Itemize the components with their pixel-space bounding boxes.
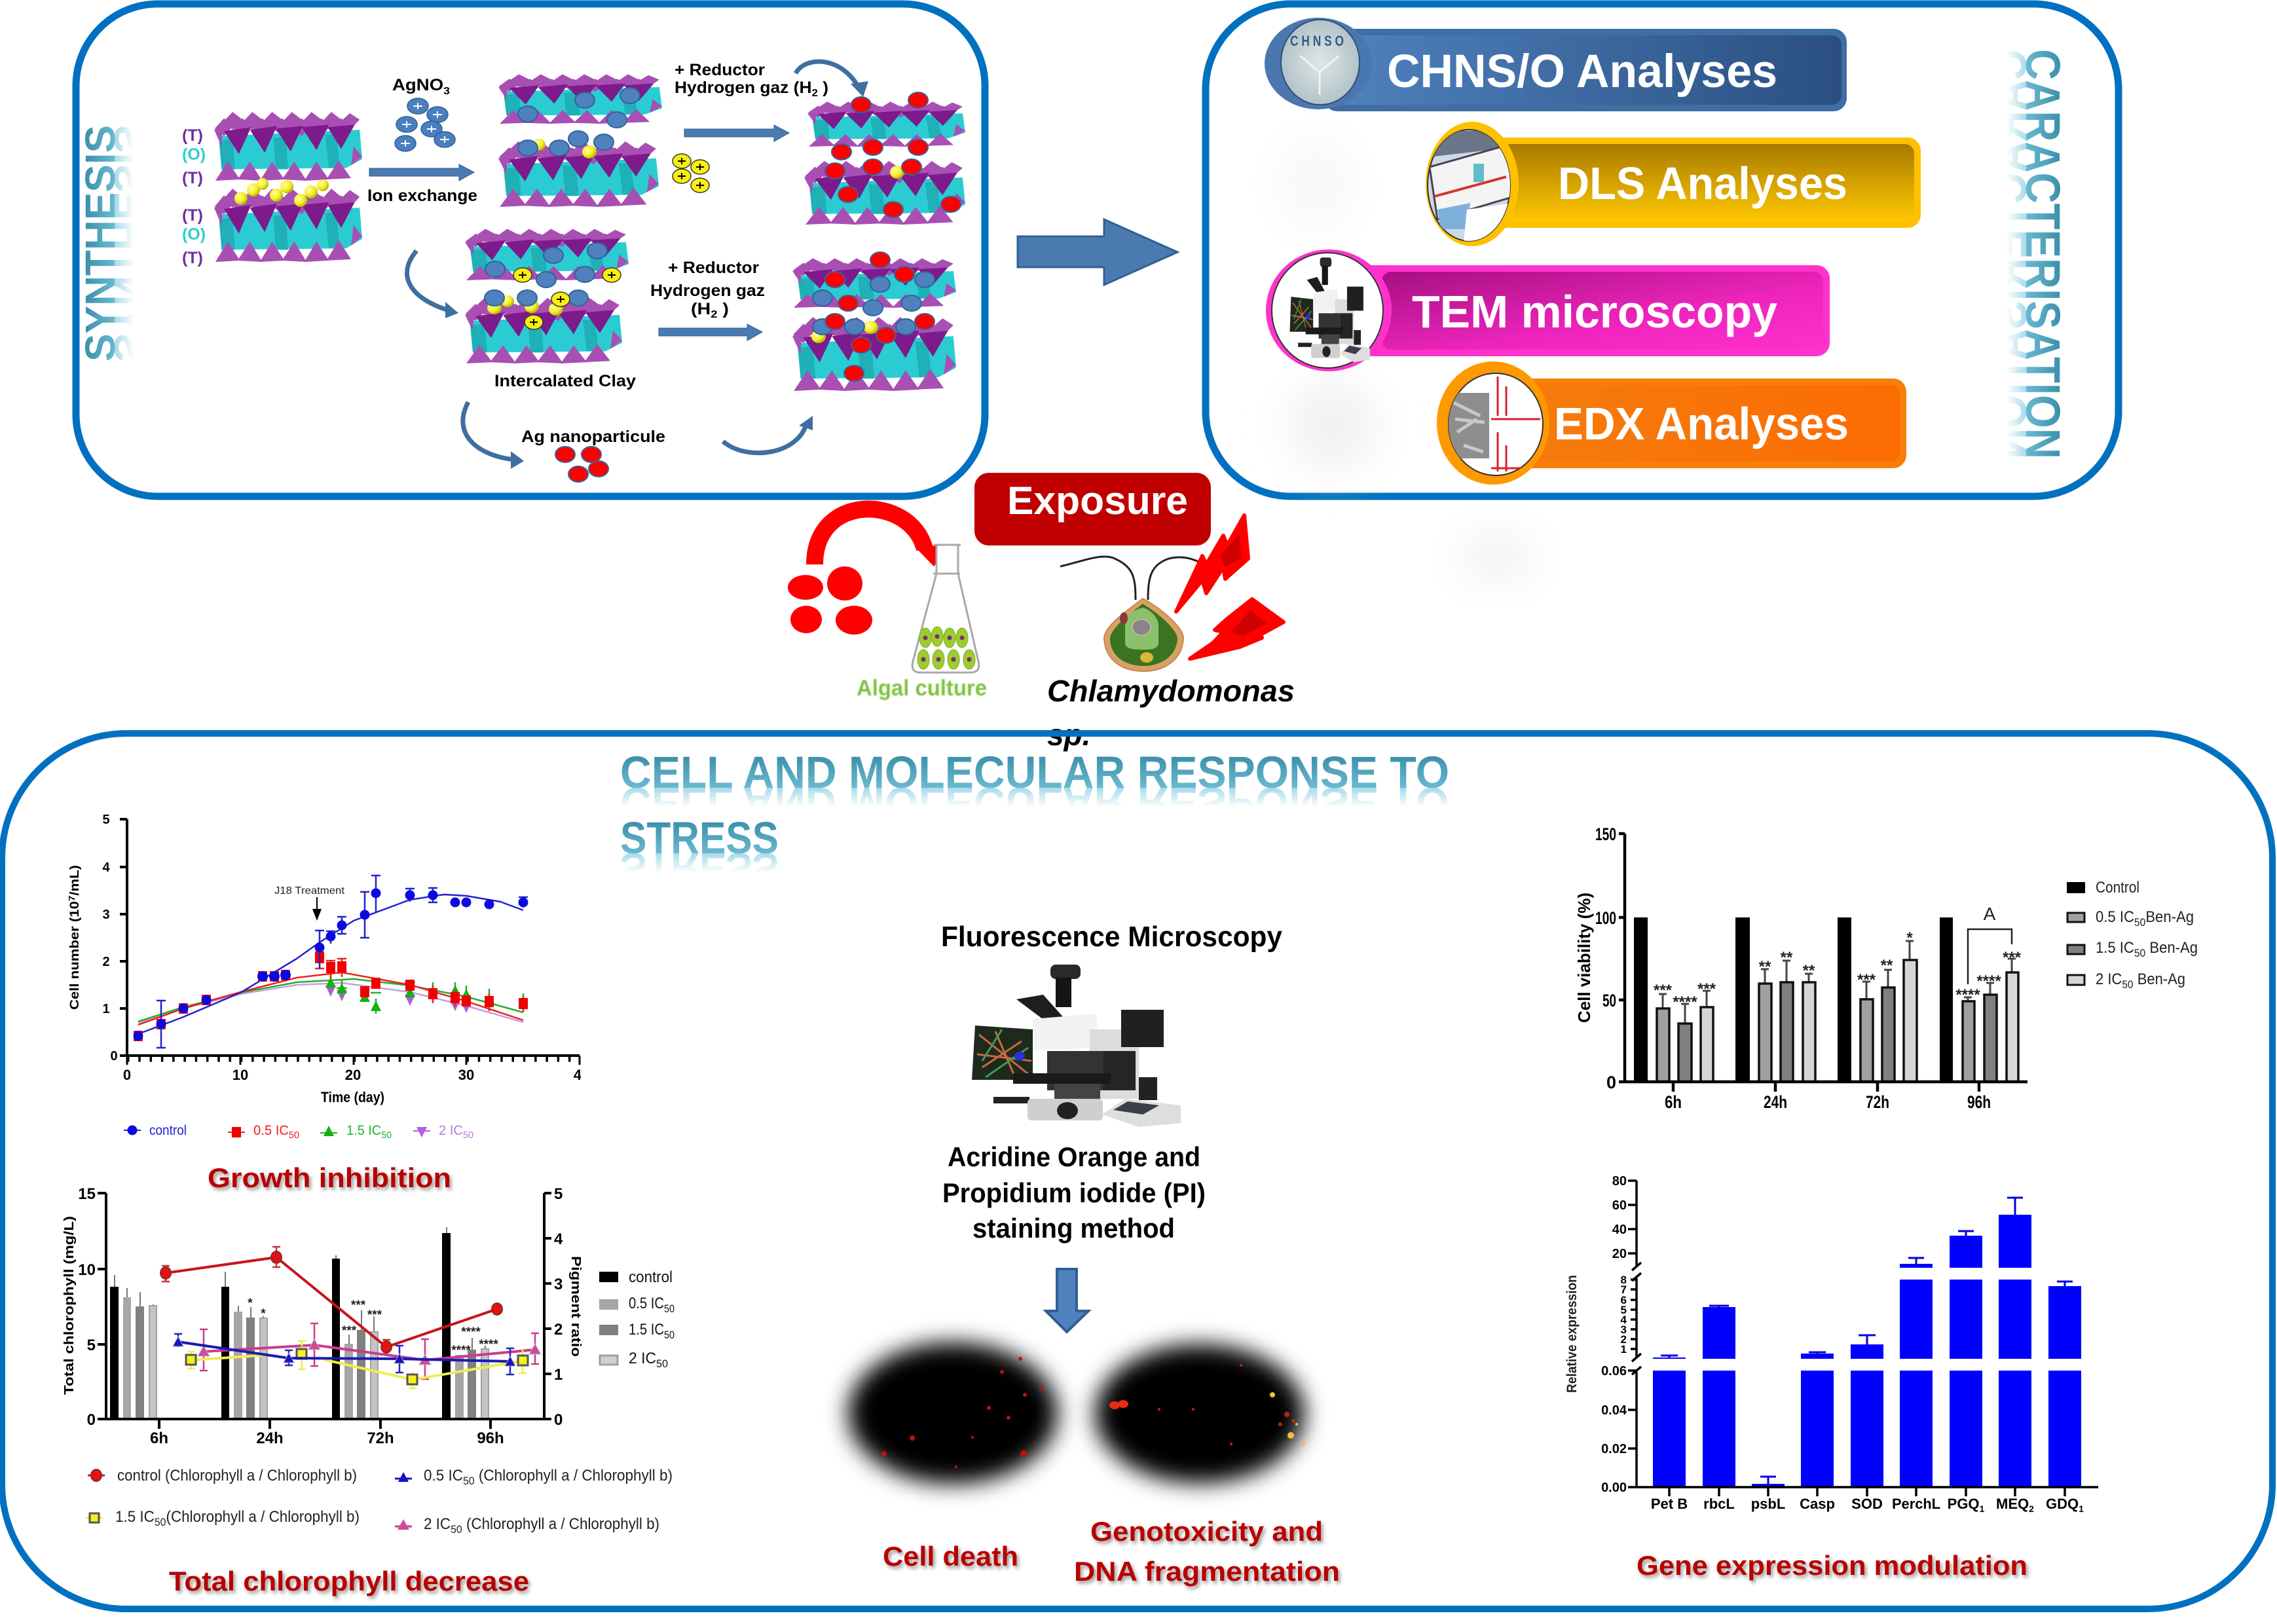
arrow: curved top	[796, 62, 868, 97]
arrow: curved to nanoparticles	[463, 402, 524, 469]
legend	[124, 1123, 473, 1141]
axes: 2	[1621, 1333, 1627, 1346]
axes: 0.04	[1601, 1403, 1627, 1418]
bar legend: 50	[664, 1329, 675, 1341]
bar legend: 0.5 IC	[629, 1295, 671, 1312]
heading: cell and molecular response to stress: STRESS	[620, 843, 779, 894]
axes: 2	[2029, 1504, 2034, 1514]
axes: 3	[1621, 1323, 1627, 1336]
y axis: 3	[102, 908, 110, 922]
significance bracket	[1968, 904, 2012, 984]
significance stars: *	[261, 1307, 266, 1321]
axes: Relative expression	[1564, 1275, 1580, 1393]
arrow: synthesis to characterisation	[1018, 219, 1177, 285]
icon: Ag nanoparticles	[555, 447, 608, 482]
y axis: 0	[110, 1049, 118, 1063]
line series: 1.5 IC50	[186, 1341, 528, 1388]
label: intercalated clay: Intercalated Clay	[494, 372, 636, 390]
heading: fluorescence microscopy: Fluorescence Microscopy	[941, 921, 1283, 953]
legend: Ben-Ag	[2145, 908, 2194, 926]
y axis	[67, 813, 127, 1063]
error bars	[1659, 941, 2016, 1024]
label: reductor bottom: 2	[711, 309, 718, 320]
clay structure: intercalated clay	[465, 229, 629, 363]
x axis: 30	[458, 1067, 474, 1083]
significance stars: *	[248, 1297, 253, 1310]
axes: 72h	[367, 1430, 394, 1447]
clay structure: starting clay	[214, 112, 362, 262]
significance stars: ***	[342, 1324, 357, 1338]
pill: CHNS/O analyses	[1265, 18, 1847, 111]
significance stars: ***	[351, 1299, 366, 1312]
y axis: 2	[102, 955, 110, 969]
line legend: 50	[155, 1516, 166, 1528]
bar legend: 2 IC	[629, 1350, 657, 1367]
legend: Control	[2096, 879, 2139, 896]
axes: 60	[1612, 1198, 1627, 1213]
axes: PGQ	[1948, 1496, 1980, 1512]
y axis: 1	[102, 1002, 110, 1016]
heading: growth inhibition: Growth inhibition	[208, 1162, 451, 1193]
text: staining method: Propidium iodide (PI)	[942, 1177, 1206, 1208]
legend: 50	[381, 1130, 392, 1141]
stars: ****	[1673, 993, 1697, 1011]
legend	[2067, 879, 2198, 991]
label: reductor top: Hydrogen gaz (H	[675, 79, 805, 97]
label: reductor top	[675, 61, 828, 99]
axes: 1	[2079, 1504, 2084, 1514]
arrow: ion exchange	[369, 164, 474, 181]
bar legend: control	[629, 1268, 673, 1286]
axes: 96h	[1967, 1092, 1991, 1112]
chart: total chlorophyll	[62, 1185, 675, 1536]
legend: 0.5 IC	[2096, 908, 2138, 926]
bars	[1634, 917, 2018, 1082]
line series: control	[160, 1247, 502, 1354]
stars: **	[1759, 958, 1771, 976]
heading: total chlorophyll decrease: Total chlorophyll decrease	[169, 1566, 529, 1596]
label: reductor bottom	[650, 259, 765, 320]
axes: 4	[1621, 1314, 1627, 1326]
bar legend: 1.5 IC	[629, 1321, 671, 1338]
y axis: Cell number (10	[68, 916, 82, 1010]
axes: 0	[87, 1411, 96, 1429]
soft grey smudge	[1457, 530, 1536, 583]
axes: 4	[554, 1230, 563, 1248]
layer labels T O T: (T)	[182, 126, 203, 145]
axes: PerchL	[1892, 1496, 1940, 1512]
axes: 50	[1602, 991, 1616, 1010]
chart: growth inhibition	[67, 813, 589, 1141]
legend: 50	[2134, 947, 2145, 959]
stars: **	[1781, 949, 1793, 967]
line legend: 0.5 IC	[424, 1467, 466, 1485]
label: sp.: sp.	[1047, 718, 1090, 752]
icon: fluorescence microscope	[972, 965, 1181, 1127]
x axis: 10	[232, 1067, 248, 1083]
stars: ***	[2003, 949, 2022, 967]
stars: ***	[1654, 982, 1673, 999]
heading: CARACTERISATION: CARACTERISATION	[2016, 49, 2070, 459]
arrow: reduction top	[684, 125, 789, 141]
legend: 50	[463, 1130, 473, 1141]
heading: CARACTERISATION: CARACTERISATION	[1982, 49, 2037, 459]
axes	[62, 1185, 583, 1447]
axes: Pet B	[1651, 1496, 1688, 1512]
chart: cell viability	[1574, 824, 2198, 1112]
pill: EDX analyses: EDX Analyses	[1554, 398, 1849, 449]
axes: 6h	[1665, 1092, 1682, 1112]
icon: culture flask	[912, 545, 979, 673]
label: ion exchange: Ion exchange	[367, 187, 477, 205]
clay structure: reduced clay top	[804, 92, 965, 225]
pill: EDX analyses	[1437, 361, 1906, 485]
layer labels T O T: (O)	[182, 145, 206, 164]
axes: 1	[554, 1366, 563, 1384]
axes: 96h	[477, 1430, 504, 1447]
series: green	[325, 974, 523, 1014]
axes: SOD	[1851, 1496, 1883, 1512]
axes: 24h	[1764, 1092, 1787, 1112]
stars: *	[1906, 929, 1913, 947]
label: reductor bottom: Hydrogen gaz	[650, 282, 765, 300]
y axis: 5	[102, 813, 110, 827]
panel: synthesis	[76, 4, 985, 496]
label: reductor top: )	[818, 79, 828, 97]
axes: 6h	[150, 1430, 168, 1447]
axes: 5	[1621, 1304, 1627, 1316]
arrow: curved to intercalated clay	[407, 251, 458, 318]
layer labels T O T: (T)	[182, 169, 203, 187]
y axis: 7	[67, 896, 77, 901]
icon: lightning bolts	[1176, 515, 1284, 659]
significance stars	[248, 1297, 498, 1357]
panel: characterisation	[1206, 4, 2119, 496]
layer labels T O T: (O)	[182, 225, 206, 244]
layer labels T O T: (T)	[182, 249, 203, 267]
series curves	[138, 895, 523, 1034]
bars	[1653, 1215, 2081, 1487]
label: reductor top: 2	[811, 88, 818, 99]
icon: silver ions	[395, 98, 455, 151]
legend: 50	[2122, 978, 2134, 991]
label: reductor bottom: )	[717, 300, 729, 318]
heading: cell and molecular response to stress: STRESS	[620, 813, 779, 863]
pill: TEM microscopy	[1266, 249, 1830, 371]
label: algal culture: Algal culture	[857, 676, 987, 701]
arrow: curved from nanoparticles	[723, 416, 813, 453]
heading: cell and molecular response to stress	[620, 747, 1449, 894]
axes: 40	[1612, 1223, 1627, 1237]
treatment annotation: J18 Treatment	[274, 885, 345, 896]
legend: 2 IC	[439, 1123, 464, 1138]
x axis: 40	[574, 1067, 589, 1083]
label: AgNO3: 3	[443, 86, 450, 97]
line series: 0.5 IC50	[173, 1334, 515, 1375]
heading: gene expression modulation: Gene expression modulation	[1637, 1550, 2027, 1581]
clay structure: exchanged clay	[498, 74, 662, 207]
x axis: Time (day)	[321, 1089, 384, 1105]
axes: 24h	[256, 1430, 284, 1447]
callout: exposure	[974, 473, 1211, 545]
label: Ag nanoparticule: Ag nanoparticule	[521, 428, 665, 446]
legend: 2 IC	[2096, 970, 2124, 988]
heading: SYNTHESIS: SYNTHESIS	[105, 125, 153, 361]
significance stars: ****	[451, 1344, 471, 1357]
bar legend	[599, 1268, 675, 1370]
axes: Cell viability (%)	[1574, 893, 1594, 1023]
heading: genotoxicity and DNA fragmentation: Genotoxicity and	[1090, 1516, 1323, 1547]
error bars	[1661, 1198, 2073, 1484]
pill: TEM microscopy: TEM microscopy	[1412, 286, 1777, 337]
label: reductor bottom: (H	[691, 300, 708, 318]
axes: 1	[1621, 1343, 1627, 1356]
axes: Pigment ratio	[568, 1256, 583, 1357]
axes: 6	[1621, 1294, 1627, 1306]
icon: nanoparticles into culture	[788, 509, 950, 635]
axes: 15	[78, 1185, 96, 1203]
pill: CHNS/O analyses: CHNS/O Analyses	[1387, 46, 1777, 98]
legend: control	[149, 1123, 187, 1138]
legend: 1.5 IC	[346, 1123, 383, 1138]
axes: Total chlorophyll (mg/L)	[62, 1216, 77, 1395]
stars	[1654, 929, 2022, 1011]
bars	[110, 1227, 489, 1419]
heading: cell and molecular response to stress: CELL AND MOLECULAR RESPONSE TO	[620, 747, 1449, 798]
axes	[1564, 1174, 2098, 1514]
axes: 3	[554, 1276, 563, 1293]
y axis: 4	[102, 860, 110, 875]
x axis: 0	[123, 1067, 131, 1083]
line legend: 50	[451, 1523, 462, 1536]
axes: 150	[1595, 824, 1616, 844]
line legend: (Chlorophyll a / Chlorophyll b)	[475, 1467, 673, 1485]
panel: cell and molecular response	[2, 733, 2272, 1609]
axes: 8	[1621, 1274, 1627, 1286]
heading: SYNTHESIS: SYNTHESIS	[77, 125, 124, 361]
arrow: staining to images	[1046, 1269, 1088, 1332]
series: control	[134, 876, 528, 1048]
heading: genotoxicity and DNA fragmentation	[1074, 1516, 1340, 1587]
layer labels T O T: (T)	[182, 206, 203, 225]
image: genotoxicity micrograph	[1095, 1344, 1305, 1483]
axes: 0.02	[1601, 1442, 1627, 1456]
treatment annotation	[274, 885, 345, 921]
axes: 2	[554, 1321, 563, 1338]
axes: psbL	[1751, 1496, 1785, 1512]
line series: 2 IC50	[198, 1323, 541, 1379]
legend: 50	[289, 1130, 299, 1141]
series: purple	[325, 986, 472, 1013]
axes: 0	[1606, 1073, 1616, 1092]
pill: DLS analyses	[1426, 122, 1921, 246]
label: reductor bottom: + Reductor	[668, 259, 759, 277]
stars: ****	[1976, 972, 2001, 990]
axes: 1	[1980, 1504, 1985, 1514]
line legend	[86, 1467, 673, 1536]
soft grey smudges	[1277, 138, 1379, 471]
significance stars: ****	[461, 1325, 481, 1339]
axes: 100	[1595, 908, 1616, 928]
image: cell death micrograph	[848, 1342, 1058, 1484]
label: Chlamydomonas: Chlamydomonas	[1047, 674, 1295, 708]
heading: cell death: Cell death	[883, 1541, 1018, 1572]
significance stars: ****	[479, 1338, 498, 1352]
line legend: (Chlorophyll a / Chlorophyll b)	[166, 1508, 360, 1526]
bar legend: 50	[664, 1302, 675, 1315]
icon: released ions	[673, 154, 709, 193]
axes: 72h	[1866, 1092, 1889, 1112]
axes	[1574, 824, 2027, 1112]
pill: CHNS/O analyses: C H N S O	[1290, 33, 1344, 49]
line legend: 50	[463, 1475, 475, 1487]
axes: 5	[554, 1185, 563, 1203]
series: red	[134, 946, 528, 1041]
pill: DLS analyses: DLS Analyses	[1558, 158, 1847, 209]
axes: MEQ	[1996, 1496, 2029, 1512]
stars: **	[1803, 962, 1815, 980]
layer labels T O T	[182, 126, 206, 267]
legend: 0.5 IC	[253, 1123, 290, 1138]
chart: gene expression	[1564, 1174, 2098, 1514]
heading: genotoxicity and DNA fragmentation: DNA fragmentation	[1074, 1556, 1340, 1587]
y axis: /mL)	[68, 865, 82, 896]
axes: 0	[554, 1411, 563, 1429]
bar legend: 50	[656, 1357, 668, 1370]
significance stars: ***	[367, 1308, 382, 1322]
significance bracket: A	[1984, 904, 1996, 924]
axes: 0.00	[1601, 1481, 1627, 1495]
axes: 80	[1612, 1174, 1627, 1189]
clay structure: reduced clay bottom	[792, 252, 956, 391]
text: staining method: Acridine Orange and	[948, 1141, 1200, 1172]
legend: Ben-Ag	[2134, 970, 2185, 988]
axes: 20	[1612, 1247, 1627, 1261]
line legend: control (Chlorophyll a / Chlorophyll b)	[117, 1467, 357, 1485]
stars: ***	[1697, 980, 1716, 998]
stars: ****	[1955, 986, 1980, 1004]
stars: **	[1881, 957, 1893, 974]
heading: SYNTHESIS	[77, 125, 153, 361]
label: reductor top: + Reductor	[675, 61, 765, 79]
axes: 10	[78, 1261, 96, 1279]
callout: exposure: Exposure	[1007, 479, 1188, 523]
line legend: 1.5 IC	[115, 1508, 157, 1526]
heading: CARACTERISATION	[1982, 49, 2070, 459]
axes: Casp	[1800, 1496, 1835, 1512]
text: staining method	[942, 1141, 1206, 1244]
line legend: 2 IC	[424, 1515, 453, 1533]
label: AgNO3: AgNO	[392, 76, 439, 94]
legend: 1.5 IC	[2096, 939, 2138, 957]
line legend: (Chlorophyll a / Chlorophyll b)	[462, 1515, 659, 1533]
stars: ***	[1857, 971, 1876, 989]
axes: 7	[1621, 1283, 1627, 1296]
arrow: reduction bottom	[659, 324, 762, 341]
axes: rbcL	[1703, 1496, 1735, 1512]
legend: 50	[2134, 916, 2145, 929]
x axis: 20	[345, 1067, 361, 1083]
axes: 5	[87, 1337, 96, 1354]
heading: cell and molecular response to stress: CELL AND MOLECULAR RESPONSE TO	[620, 778, 1449, 828]
axes: 0.06	[1601, 1364, 1627, 1378]
axes: GDQ	[2046, 1496, 2079, 1512]
icon: Chlamydomonas cell	[1060, 557, 1200, 671]
legend: Ben-Ag	[2145, 939, 2198, 957]
text: staining method: staining method	[972, 1213, 1175, 1244]
x axis	[123, 1056, 589, 1105]
